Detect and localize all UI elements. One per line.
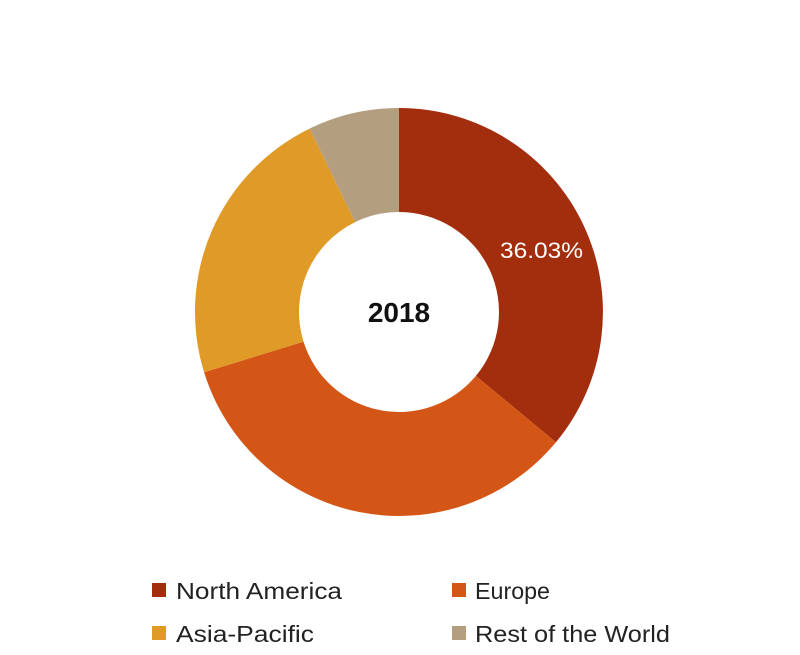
center label: 2018: 2018 (368, 297, 430, 328)
donut chart (195, 108, 603, 516)
legend item: Asia-Pacific: Asia-Pacific (176, 621, 314, 647)
legend item: Europe: Europe (475, 578, 550, 604)
segment: North America (399, 108, 603, 442)
legend item: North America: North America (176, 578, 342, 604)
segment: Europe (204, 342, 556, 516)
legend item: Rest of the World: Rest of the World (475, 621, 670, 647)
data label: 36.03%: 36.03% (500, 238, 583, 263)
segment: Asia-Pacific (195, 129, 355, 372)
segment: Rest of the World (310, 108, 399, 222)
legend (152, 578, 670, 647)
